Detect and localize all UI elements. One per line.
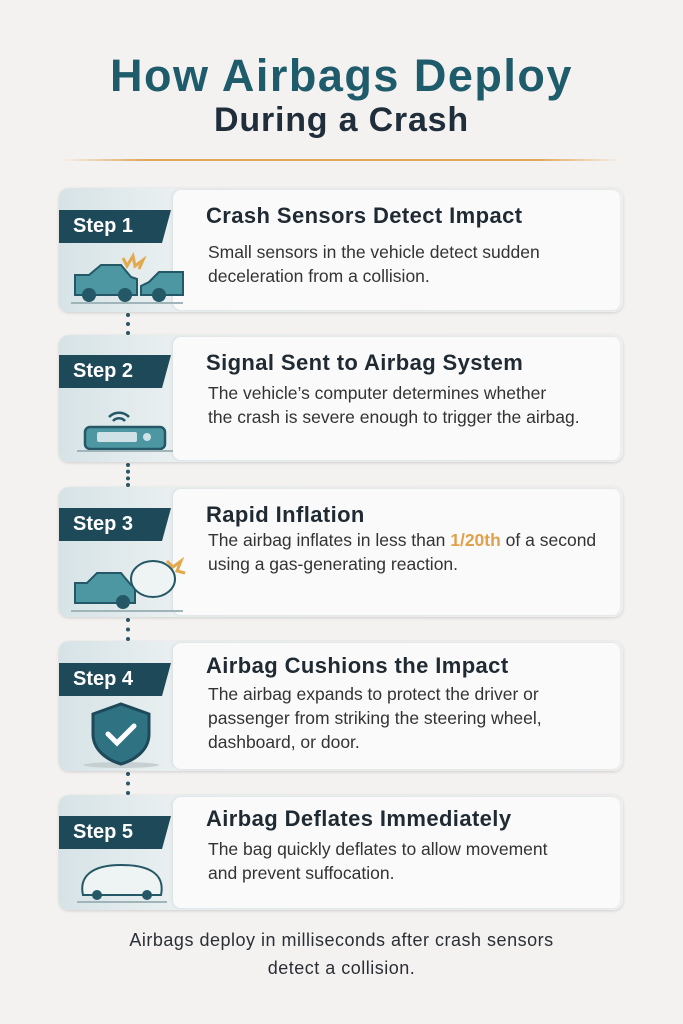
heading: Crash Sensors Detect Impact (206, 203, 522, 228)
body text (208, 530, 596, 574)
panel: step 4 (59, 641, 623, 771)
icon: shield check (83, 702, 159, 768)
body text: Small sensors in the vehicle detect sudden (208, 242, 540, 262)
footer note (129, 930, 554, 978)
body text (208, 383, 580, 427)
step 3 label (59, 508, 171, 541)
step 2 label: Step 2 (73, 360, 133, 382)
body text (208, 839, 548, 883)
step 3 label: Step 3 (73, 513, 133, 535)
body text (208, 242, 540, 286)
title: How Airbags Deploy (110, 50, 573, 101)
step 5 label (59, 816, 171, 849)
body text: The vehicle’s computer determines whether (208, 383, 546, 403)
body text: The airbag expands to protect the driver or (208, 684, 539, 704)
step 1 label (59, 210, 171, 243)
body text: and prevent suffocation. (208, 863, 394, 883)
body text: the crash is severe enough to trigger the airbag. (208, 407, 580, 427)
panel: step 2 (59, 335, 623, 462)
step 4 label (59, 663, 171, 696)
panel: step 3 (59, 487, 623, 617)
panel: step 1 (59, 188, 623, 312)
step 4 label: Step 4 (73, 668, 133, 690)
icon: car crash (71, 252, 184, 304)
heading: Airbag Deflates Immediately (206, 806, 511, 831)
icon: deflated airbag (77, 864, 167, 903)
body text: The airbag inflates in less than 1/20th of a second (208, 530, 596, 550)
body text: The bag quickly deflates to allow movement (208, 839, 547, 859)
icon: airbag inflating (71, 556, 186, 612)
body text: deceleration from a collision. (208, 266, 430, 286)
heading: Signal Sent to Airbag System (206, 350, 523, 375)
footer note: Airbags deploy in milliseconds after crash sensors (129, 930, 554, 950)
body text (208, 684, 542, 752)
body text: passenger from striking the steering wheel, (208, 708, 542, 728)
footer note: detect a collision. (268, 958, 415, 978)
subtitle: During a Crash (214, 101, 469, 139)
step 5 label: Step 5 (73, 821, 133, 843)
heading: Rapid Inflation (206, 502, 365, 527)
icon: control unit (77, 412, 173, 452)
heading: Airbag Cushions the Impact (206, 653, 509, 678)
body text: using a gas-generating reaction. (208, 554, 458, 574)
step 2 label (59, 355, 171, 388)
panel: step 5 (59, 795, 623, 910)
body text: dashboard, or door. (208, 732, 360, 752)
step 1 label: Step 1 (73, 215, 133, 237)
